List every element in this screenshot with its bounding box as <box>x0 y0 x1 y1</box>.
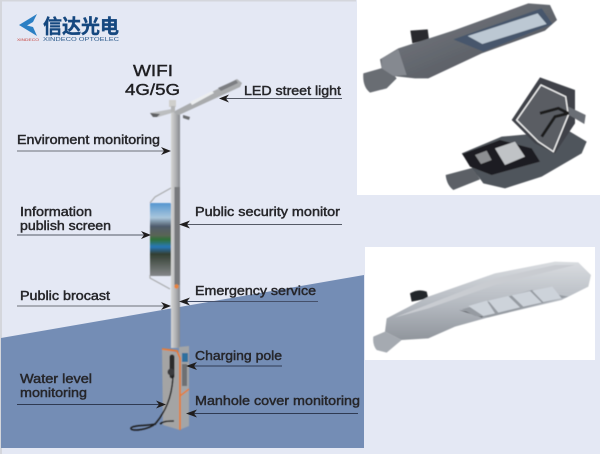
lamp sensor <box>410 29 429 43</box>
label: Public security monitor: Public security monitor <box>195 205 340 219</box>
lamp spigot <box>363 67 397 93</box>
information screen <box>150 203 171 276</box>
label: Information publish screen <box>17 205 151 239</box>
open lamp gasket <box>517 85 568 152</box>
pole display band <box>174 187 180 285</box>
open lamp spigot <box>446 168 480 190</box>
logo English name: XINDECO OPTOELEC <box>43 37 120 43</box>
panel: blue ground wedge <box>1 275 364 448</box>
box display <box>182 353 188 362</box>
product photo: open street light <box>446 77 587 190</box>
icon: logo arrow <box>19 14 37 36</box>
orange indicator <box>174 284 179 289</box>
silver lamp sensor <box>410 290 428 302</box>
box orange slanted trim <box>180 389 189 396</box>
heading: connectivity: WIFI <box>133 63 173 80</box>
silver lamp underside <box>462 290 568 317</box>
label: LED street light: LED street light <box>244 84 342 98</box>
logo <box>17 14 120 43</box>
silver lamp top highlight <box>395 265 575 317</box>
charging cable <box>131 376 173 430</box>
lamp body <box>380 3 557 78</box>
label: Water level monitoring <box>17 372 166 408</box>
charging gun <box>170 357 174 376</box>
label: Charging pole <box>186 349 282 370</box>
open lamp driver <box>495 142 525 165</box>
top edge and left edge <box>0 0 356 454</box>
smart pole illustration <box>150 79 242 348</box>
LED lamp arm <box>173 79 242 115</box>
label: Information publish screen: Information <box>20 205 92 219</box>
label: Enviroment monitoring: Enviroment monitoring <box>17 133 160 147</box>
open lamp hinge <box>568 107 586 124</box>
label: Public security monitor <box>179 205 342 228</box>
silver lamp spigot <box>373 332 402 353</box>
screen bracket <box>150 188 171 289</box>
pole shaft <box>171 112 180 348</box>
box top orange trim <box>162 349 180 430</box>
open lamp driver compartment <box>462 140 540 175</box>
label: Public brocast <box>17 289 171 310</box>
product photo: closed dark street light <box>363 3 557 93</box>
silver lamp body <box>385 262 591 340</box>
label: Emergency service <box>179 284 318 306</box>
silver lamp LED modules <box>468 287 562 316</box>
label: Manhole cover monitoring <box>186 394 360 418</box>
label: Enviroment monitoring <box>17 133 171 155</box>
lamp LED array <box>468 13 547 44</box>
heading: connectivity <box>125 63 180 99</box>
logo red label: XINDECO <box>17 37 39 42</box>
logo Chinese name: 信达光电 <box>43 16 119 38</box>
label: LED street light <box>219 84 342 102</box>
box front face <box>162 349 180 430</box>
box panel <box>182 364 187 386</box>
silver lamp slit <box>459 310 486 317</box>
label: Water level monitoring: monitoring <box>20 386 87 400</box>
lamp LED tray <box>453 8 552 52</box>
box side face <box>179 346 189 430</box>
open lamp wires <box>540 108 568 137</box>
label: Emergency service: Emergency service <box>195 284 316 298</box>
charging pole <box>131 346 189 430</box>
panel: top right product photo background <box>357 0 600 195</box>
label: Charging pole: Charging pole <box>195 349 282 363</box>
heading: connectivity: 4G/5G <box>125 82 180 99</box>
label: Water level monitoring: Water level <box>20 372 92 386</box>
open lamp compartment parts <box>475 151 492 164</box>
top cap <box>169 100 176 107</box>
lamp front facet <box>382 49 407 76</box>
camera <box>183 115 190 120</box>
panel: lower right product photo background <box>365 247 595 360</box>
label: Information publish screen: publish screen <box>20 219 111 233</box>
label: Manhole cover monitoring: Manhole cover monitoring <box>195 394 360 408</box>
open lamp cover <box>512 77 575 153</box>
small lamp head <box>150 109 175 117</box>
open lamp lower body <box>462 131 587 188</box>
product photo: silver street light <box>373 262 591 353</box>
label: Public brocast: Public brocast <box>20 289 111 303</box>
